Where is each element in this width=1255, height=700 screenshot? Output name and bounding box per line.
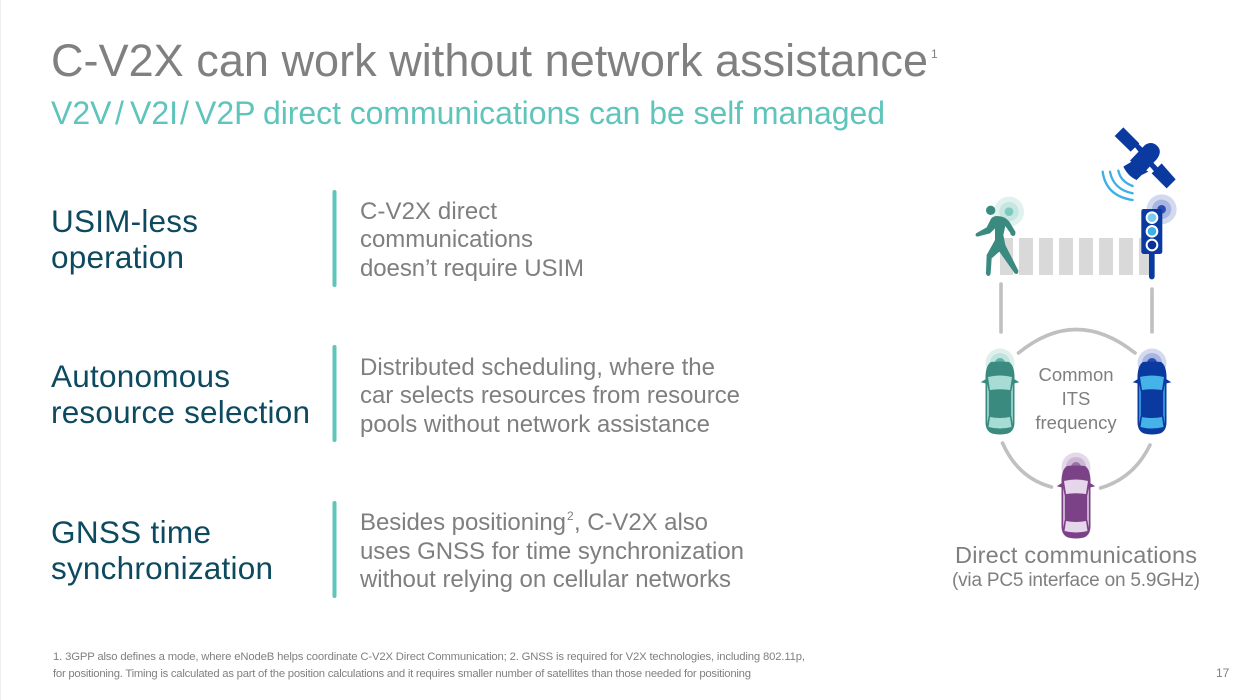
subtitle: V2V bbox=[51, 95, 112, 131]
row: USIM-less operation bbox=[51, 190, 584, 287]
label: Common ITS frequency: frequency bbox=[1035, 412, 1117, 433]
description: Autonomous: Distributed scheduling, where the bbox=[360, 354, 715, 381]
heading: Autonomous resource selection bbox=[51, 358, 310, 430]
heading: USIM-less operation bbox=[51, 203, 198, 275]
description: GNSS: uses GNSS for time synchronization bbox=[360, 538, 744, 565]
description: GNSS: without relying on cellular networks bbox=[359, 566, 731, 593]
description: USIM-less: communications bbox=[360, 226, 533, 253]
description: USIM-less: doesn’t require USIM bbox=[360, 255, 584, 282]
heading: Autonomous resource selection: Autonomous bbox=[51, 358, 230, 394]
car: blue bbox=[1134, 348, 1170, 434]
row: GNSS time synchronization bbox=[51, 501, 744, 598]
description: USIM-less bbox=[360, 198, 584, 282]
page number: 17 bbox=[1216, 666, 1230, 680]
car: teal bbox=[982, 348, 1018, 434]
subtitle: V2I bbox=[130, 95, 178, 131]
label: Common ITS frequency: ITS bbox=[1062, 388, 1090, 409]
connector lines bbox=[1001, 284, 1152, 488]
icon: satellite bbox=[1103, 127, 1176, 200]
heading: USIM-less operation: operation bbox=[51, 239, 184, 275]
heading: GNSS time synchronization: GNSS time bbox=[51, 514, 211, 550]
caption: direct communications: Direct communications bbox=[955, 542, 1197, 568]
description: GNSS: 2 bbox=[567, 509, 574, 523]
crosswalk bbox=[1000, 238, 1149, 275]
icon: traffic light bbox=[1141, 194, 1177, 279]
subtitle: / bbox=[115, 95, 124, 131]
description: USIM-less: C-V2X direct bbox=[360, 198, 497, 225]
caption: direct communications: (via PC5 interface on 5.9GHz) bbox=[952, 570, 1200, 591]
subtitle: V2P bbox=[195, 95, 255, 131]
description: Autonomous: pools without network assistance bbox=[360, 411, 710, 438]
heading: GNSS time synchronization: synchronization bbox=[51, 550, 273, 586]
heading: USIM-less operation: USIM-less bbox=[51, 203, 198, 239]
diagram: direct communications bbox=[952, 127, 1200, 591]
footnotes: 1. 3GPP also defines a mode, where eNodeB helps coordinate C-V2X Direct Communication; 2. GNSS is required for V2X technologies, including 802.11p, bbox=[53, 651, 805, 663]
footnotes bbox=[53, 651, 805, 680]
description: Autonomous: car selects resources from resource bbox=[360, 382, 740, 409]
label: Common ITS frequency bbox=[1035, 364, 1117, 433]
row: Autonomous resource selection bbox=[51, 345, 740, 442]
footnotes: for positioning. Timing is calculated as part of the position calculations and it requires smaller number of satellites than those needed for positioning bbox=[53, 668, 751, 680]
title: 1 bbox=[931, 47, 938, 61]
heading: Autonomous resource selection: resource selection bbox=[51, 394, 310, 430]
caption: direct communications bbox=[952, 542, 1200, 591]
heading: GNSS time synchronization bbox=[51, 514, 273, 586]
title: C-V2X can work without network assistance bbox=[51, 35, 928, 86]
icon: pedestrian bbox=[976, 197, 1024, 276]
description: GNSS bbox=[359, 509, 744, 593]
car: purple bbox=[1058, 452, 1094, 538]
description: GNSS: Besides positioning bbox=[360, 509, 566, 536]
subtitle: / bbox=[180, 95, 189, 131]
label: Common ITS frequency: Common bbox=[1038, 364, 1114, 385]
subtitle: direct communications can be self managed bbox=[263, 95, 885, 131]
description: GNSS: , C-V2X also bbox=[574, 509, 708, 536]
description: Autonomous bbox=[360, 354, 740, 438]
